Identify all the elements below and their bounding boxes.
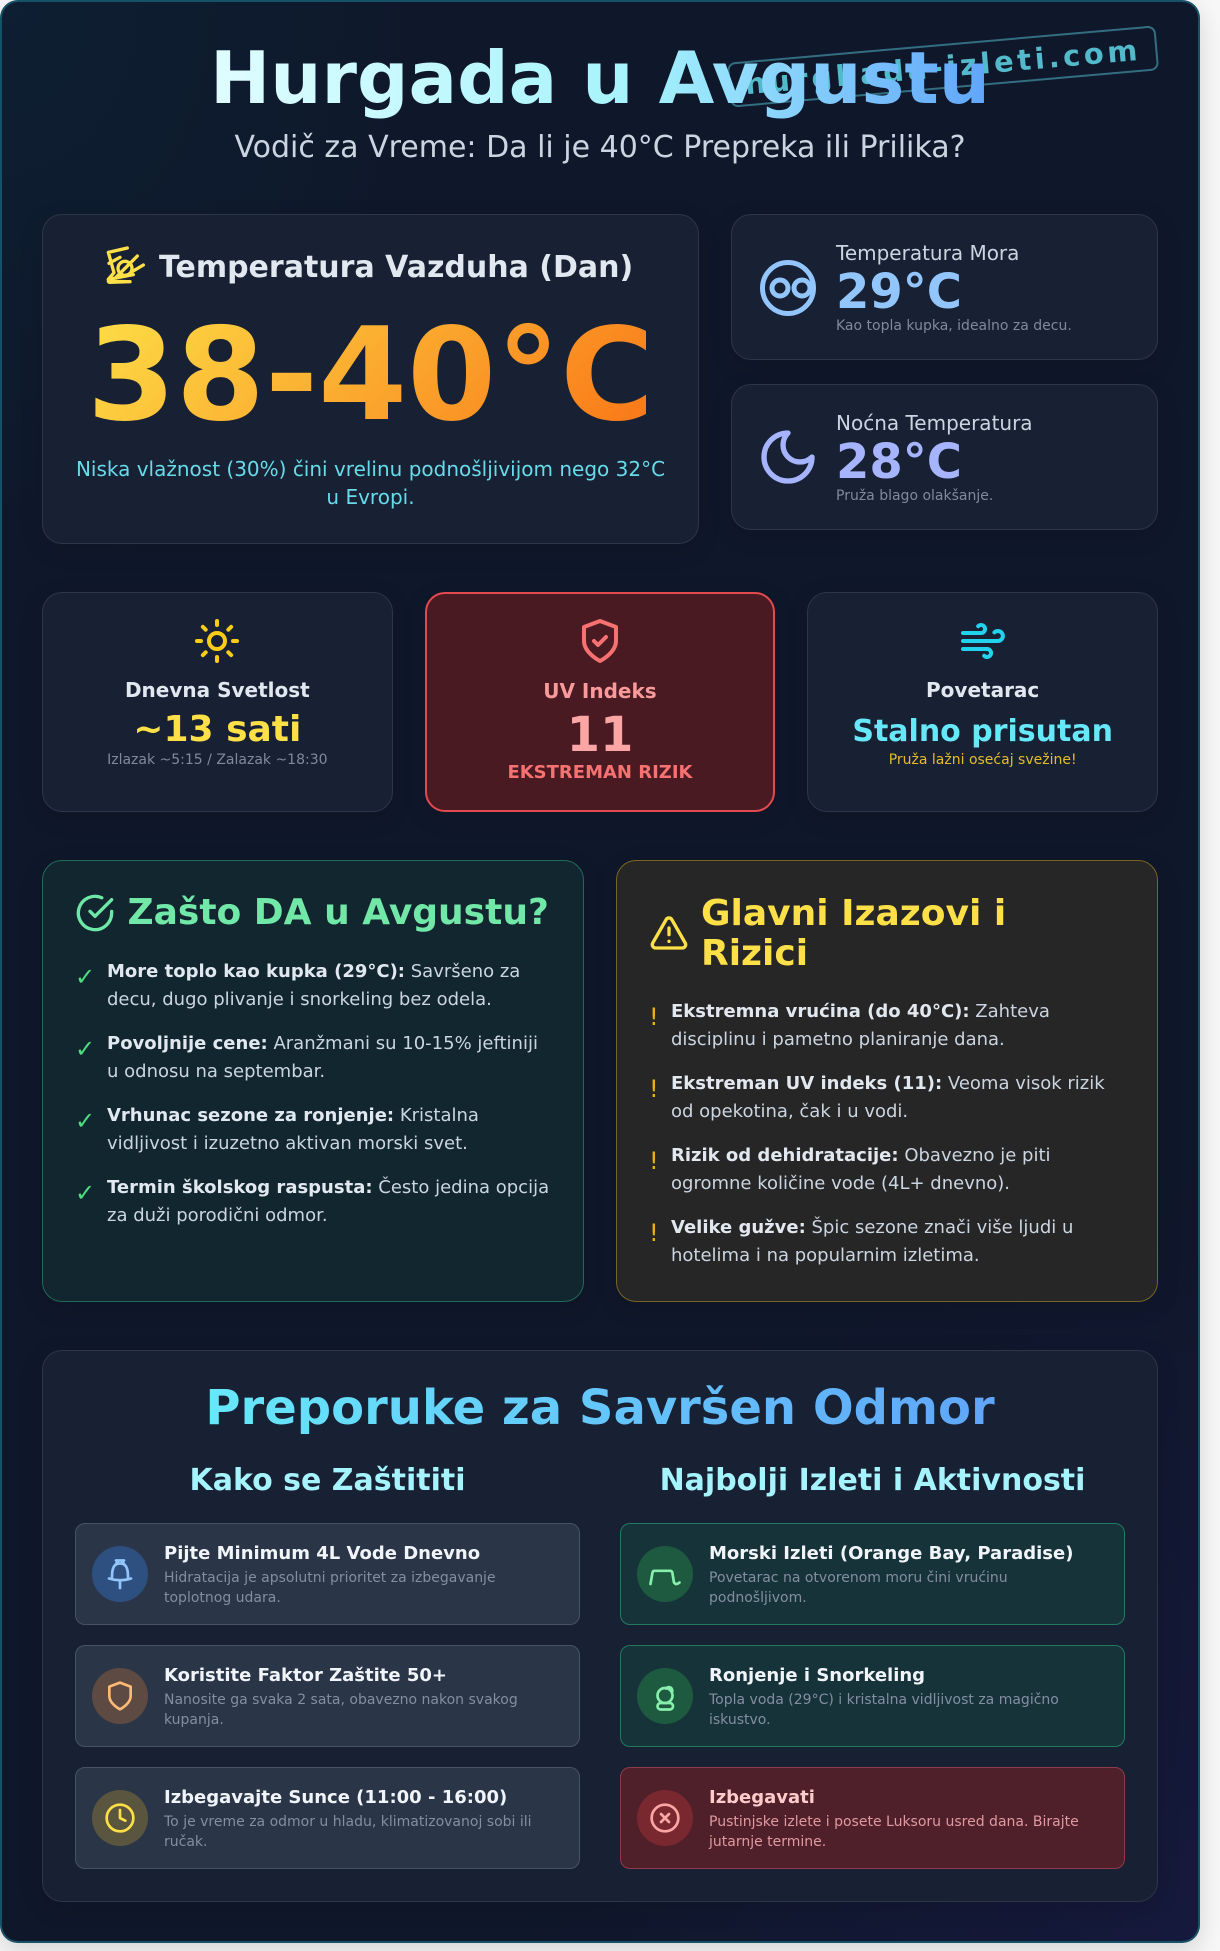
list item: dehydration (649, 1144, 1051, 1194)
tip: water (75, 1523, 580, 1625)
icon: snorkel (637, 1668, 693, 1724)
description (709, 1570, 1008, 1606)
heading: air temperature: Temperatura Vazduha (Dan) (159, 250, 633, 284)
icon: check circle (76, 894, 114, 932)
label: Temperatura Mora (836, 241, 1019, 265)
list item: warm sea: More toplo kao kupka (29°C): Savršeno za (107, 960, 520, 982)
description: To je vreme za odmor u hladu, klimatizovanoj sobi ili (164, 1814, 532, 1830)
icon: shield check (582, 619, 618, 663)
description: jutarnje termine. (709, 1834, 826, 1850)
stamp: website watermark: hurghada-izleti.com (744, 32, 1142, 101)
icon: scribbled sun (106, 246, 146, 284)
title: Hurgada u Avgustu (210, 36, 990, 120)
panel: recommendations (42, 1350, 1158, 1902)
list item: school holidays: Termin školskog raspusta: Često jedina opcija (107, 1176, 549, 1198)
heading: Glavni Izazovi i (701, 892, 1006, 934)
list item: prices: Povoljnije cene: Aranžmani su 10-15% jeftiniji (107, 1032, 538, 1054)
description: Pruža blago olakšanje. (836, 488, 993, 504)
list item: dehydration: ! (649, 1147, 659, 1175)
panel: daylight (42, 592, 393, 812)
heading: Preporuke za Savršen Odmor (205, 1380, 995, 1436)
sunrise and sunset: Izlazak ~5:15 / Zalazak ~18:30 (107, 752, 328, 768)
heading: Rizici (701, 932, 808, 974)
description (164, 1814, 532, 1850)
icon: bridge (637, 1546, 693, 1602)
description: podnošljivom. (709, 1590, 807, 1606)
list item: prices: u odnosu na septembar. (107, 1060, 325, 1082)
panel: air temperature (42, 214, 699, 544)
subtitle: Vodič za Vreme: Da li je 40°C Prepreka ili Prilika? (234, 130, 966, 165)
activity: avoid (620, 1767, 1125, 1869)
title: Koristite Faktor Zaštite 50+ (164, 1665, 447, 1686)
value: 11 (567, 707, 633, 763)
value: ~13 sati (133, 708, 301, 750)
note: humidity (76, 457, 665, 509)
label: Dnevna Svetlost (125, 678, 310, 702)
description: Pustinjske izlete i posete Luksoru usred dana. Birajte (709, 1814, 1079, 1830)
description (164, 1570, 496, 1606)
list item: warm sea (75, 960, 520, 1010)
panel: breeze (807, 592, 1158, 812)
icon: x circle (637, 1790, 693, 1846)
list item: diving (75, 1104, 479, 1154)
subheading: activities: Najbolji Izleti i Aktivnosti (660, 1463, 1085, 1498)
warning note: Pruža lažni osećaj svežine! (889, 752, 1077, 768)
list item: prices: ✓ (75, 1034, 95, 1062)
description: Hidratacija je apsolutni prioritet za izbegavanje (164, 1570, 496, 1586)
heading (701, 892, 1006, 974)
list item: UV: Ekstreman UV indeks (11): Veoma visok rizik (671, 1072, 1105, 1094)
icon: sea (760, 260, 816, 316)
description: Kao topla kupka, idealno za decu. (836, 318, 1072, 334)
list item: heat: ! (649, 1003, 659, 1031)
tip: sunscreen (75, 1645, 580, 1747)
icon: clock (92, 1790, 148, 1846)
description: Povetarac na otvorenom moru čini vrućinu (709, 1570, 1008, 1586)
label: UV Indeks (543, 679, 657, 703)
list item: crowds: Velike gužve: Špic sezone znači više ljudi u (671, 1216, 1073, 1238)
subheading: protection: Kako se Zaštititi (189, 1463, 466, 1498)
list item: crowds: ! (649, 1219, 659, 1247)
list item: heat: Ekstremna vrućina (do 40°C): Zahteva (671, 1000, 1050, 1022)
icon: moon (761, 430, 815, 484)
label: Povetarac (926, 678, 1039, 702)
description (708, 1814, 1079, 1850)
label: Noćna Temperatura (836, 411, 1033, 435)
value: 28°C (836, 434, 962, 490)
icon: bell (92, 1546, 148, 1602)
panel: challenges and risks (616, 860, 1158, 1302)
list item: dehydration: Rizik od dehidratacije: Obavezno je piti (671, 1144, 1051, 1166)
description (164, 1692, 518, 1728)
tip: avoid sun (75, 1767, 580, 1869)
activity: diving (620, 1645, 1125, 1747)
list item: school holidays: za duži porodični odmor. (107, 1204, 328, 1226)
icon: warning triangle (650, 916, 688, 950)
description: Nanosite ga svaka 2 sata, obavezno nakon svakog (164, 1692, 518, 1708)
value: 29°C (836, 264, 962, 320)
panel: night temperature (731, 384, 1158, 530)
description: Topla voda (29°C) i kristalna vidljivost za magično (709, 1692, 1059, 1708)
panel: sea temperature (731, 214, 1158, 360)
list item: heat: disciplinu i pametno planiranje dana. (671, 1028, 1005, 1050)
list item: crowds: hotelima i na popularnim izletima. (671, 1244, 980, 1266)
description: toplotnog udara. (164, 1590, 281, 1606)
list item: UV: ! (649, 1075, 659, 1103)
heading: Zašto DA u Avgustu? (128, 892, 549, 932)
list item: school holidays (75, 1176, 549, 1226)
list item: UV (649, 1072, 1105, 1122)
title: Izbegavajte Sunce (11:00 - 16:00) (164, 1787, 507, 1808)
icon: sun (195, 619, 239, 663)
risk label: EKSTREMAN RIZIK (507, 762, 693, 782)
list item: dehydration: ogromne količine vode (4L+ dnevno). (671, 1172, 1010, 1194)
icon: shield (92, 1668, 148, 1724)
list item: UV: od opekotina, čak i u vodi. (671, 1100, 908, 1122)
description: kupanja. (164, 1712, 224, 1728)
list item: school holidays: ✓ (75, 1178, 95, 1206)
title: Ronjenje i Snorkeling (709, 1665, 925, 1686)
big number: temperature: 38-40°C (87, 301, 654, 450)
icon: wind (961, 623, 1005, 659)
list item: diving: Vrhunac sezone za ronjenje: Kristalna (107, 1104, 479, 1126)
list item: heat (649, 1000, 1050, 1050)
description: iskustvo. (709, 1712, 771, 1728)
list item: prices (75, 1032, 538, 1082)
activity: sea trips (620, 1523, 1125, 1625)
list item: diving: vidljivost i izuzetno aktivan morski svet. (107, 1132, 468, 1154)
description (708, 1692, 1059, 1728)
title: Pijte Minimum 4L Vode Dnevno (164, 1543, 480, 1564)
panel: reasons for August (42, 860, 584, 1302)
list item: warm sea: decu, dugo plivanje i snorkeling bez odela. (107, 988, 492, 1010)
description: ručak. (164, 1834, 207, 1850)
list item: crowds (649, 1216, 1073, 1266)
panel: UV index (425, 592, 775, 812)
note: humidity: u Evropi. (326, 485, 415, 509)
value: Stalno prisutan (852, 714, 1113, 748)
title: Izbegavati (709, 1787, 815, 1808)
title: Morski Izleti (Orange Bay, Paradise) (709, 1543, 1073, 1564)
note: humidity: Niska vlažnost (30%) čini vrelinu podnošljivijom nego 32°C (76, 457, 665, 481)
list item: diving: ✓ (75, 1106, 95, 1134)
list item: warm sea: ✓ (75, 962, 95, 990)
